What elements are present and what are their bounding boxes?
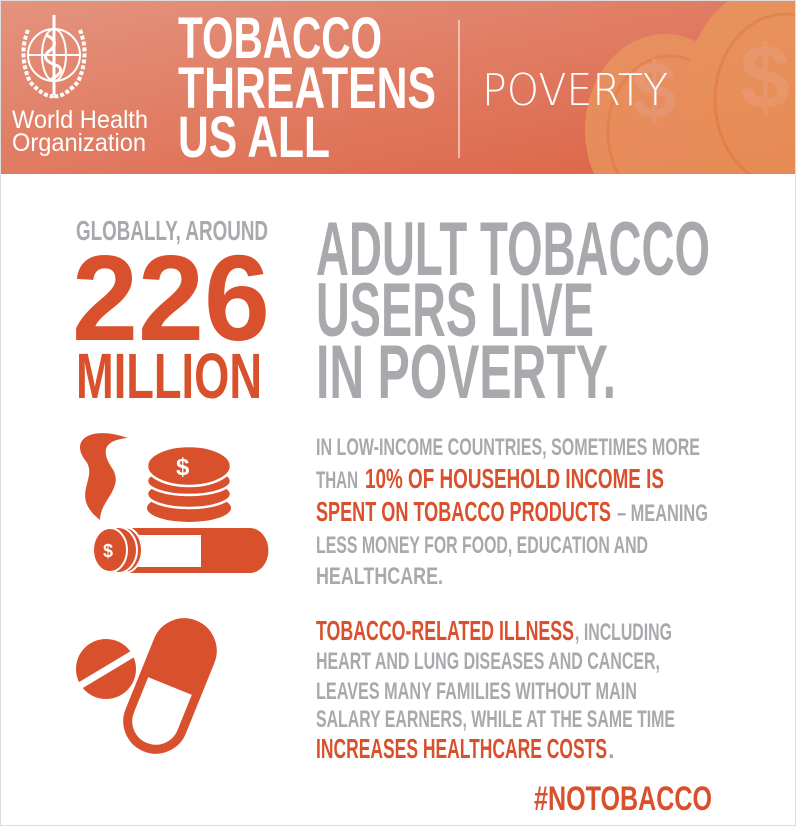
WHO logo bbox=[23, 15, 85, 96]
paragraph: household income: 10% OF HOUSEHOLD INCOME IS bbox=[365, 463, 664, 494]
paragraph: illness: INCREASES HEALTHCARE COSTS bbox=[316, 733, 607, 764]
hashtag: #NOTOBACCO bbox=[534, 780, 712, 818]
WHO name bbox=[12, 106, 148, 157]
header banner bbox=[1, 1, 795, 174]
paragraph: illness bbox=[316, 615, 675, 764]
coins decoration: $ bbox=[740, 28, 790, 128]
WHO name: Organization bbox=[12, 129, 146, 157]
icon: cigarette with coins: $ bbox=[103, 541, 113, 561]
paragraph: illness: LEAVES MANY FAMILIES WITHOUT MAIN bbox=[316, 678, 637, 705]
paragraph: illness: . bbox=[608, 737, 615, 764]
paragraph: household income: HEALTHCARE. bbox=[316, 563, 443, 590]
title bbox=[178, 6, 436, 170]
stat: 226 million: GLOBALLY, AROUND bbox=[76, 215, 268, 246]
headline: IN POVERTY. bbox=[316, 330, 616, 415]
coins decoration bbox=[585, 1, 795, 174]
icon: pills bbox=[76, 609, 226, 759]
paragraph: illness: , INCLUDING bbox=[575, 619, 672, 646]
paragraph: household income bbox=[316, 434, 708, 590]
paragraph: household income: THAN bbox=[316, 467, 358, 494]
headline bbox=[316, 207, 710, 415]
stat: 226 million: 226 bbox=[72, 230, 270, 366]
stat: 226 million: MILLION bbox=[76, 340, 262, 412]
title: US ALL bbox=[178, 105, 330, 170]
title: THREATENS bbox=[178, 56, 436, 121]
title: TOBACCO bbox=[178, 6, 382, 71]
subtitle: poverty: POVERTY bbox=[482, 65, 668, 116]
headline: USERS LIVE bbox=[316, 268, 594, 353]
icon: cigarette with coins bbox=[80, 433, 268, 573]
paragraph: household income: – MEANING bbox=[617, 500, 708, 527]
paragraph: household income: SPENT ON TOBACCO PRODUCTS bbox=[316, 496, 611, 527]
paragraph: illness: TOBACCO-RELATED ILLNESS bbox=[316, 615, 574, 646]
stat: 226 million bbox=[72, 215, 270, 412]
coins decoration: $ bbox=[632, 46, 676, 135]
WHO name: World Health bbox=[12, 106, 148, 134]
icon: cigarette with coins: $ bbox=[176, 454, 190, 481]
